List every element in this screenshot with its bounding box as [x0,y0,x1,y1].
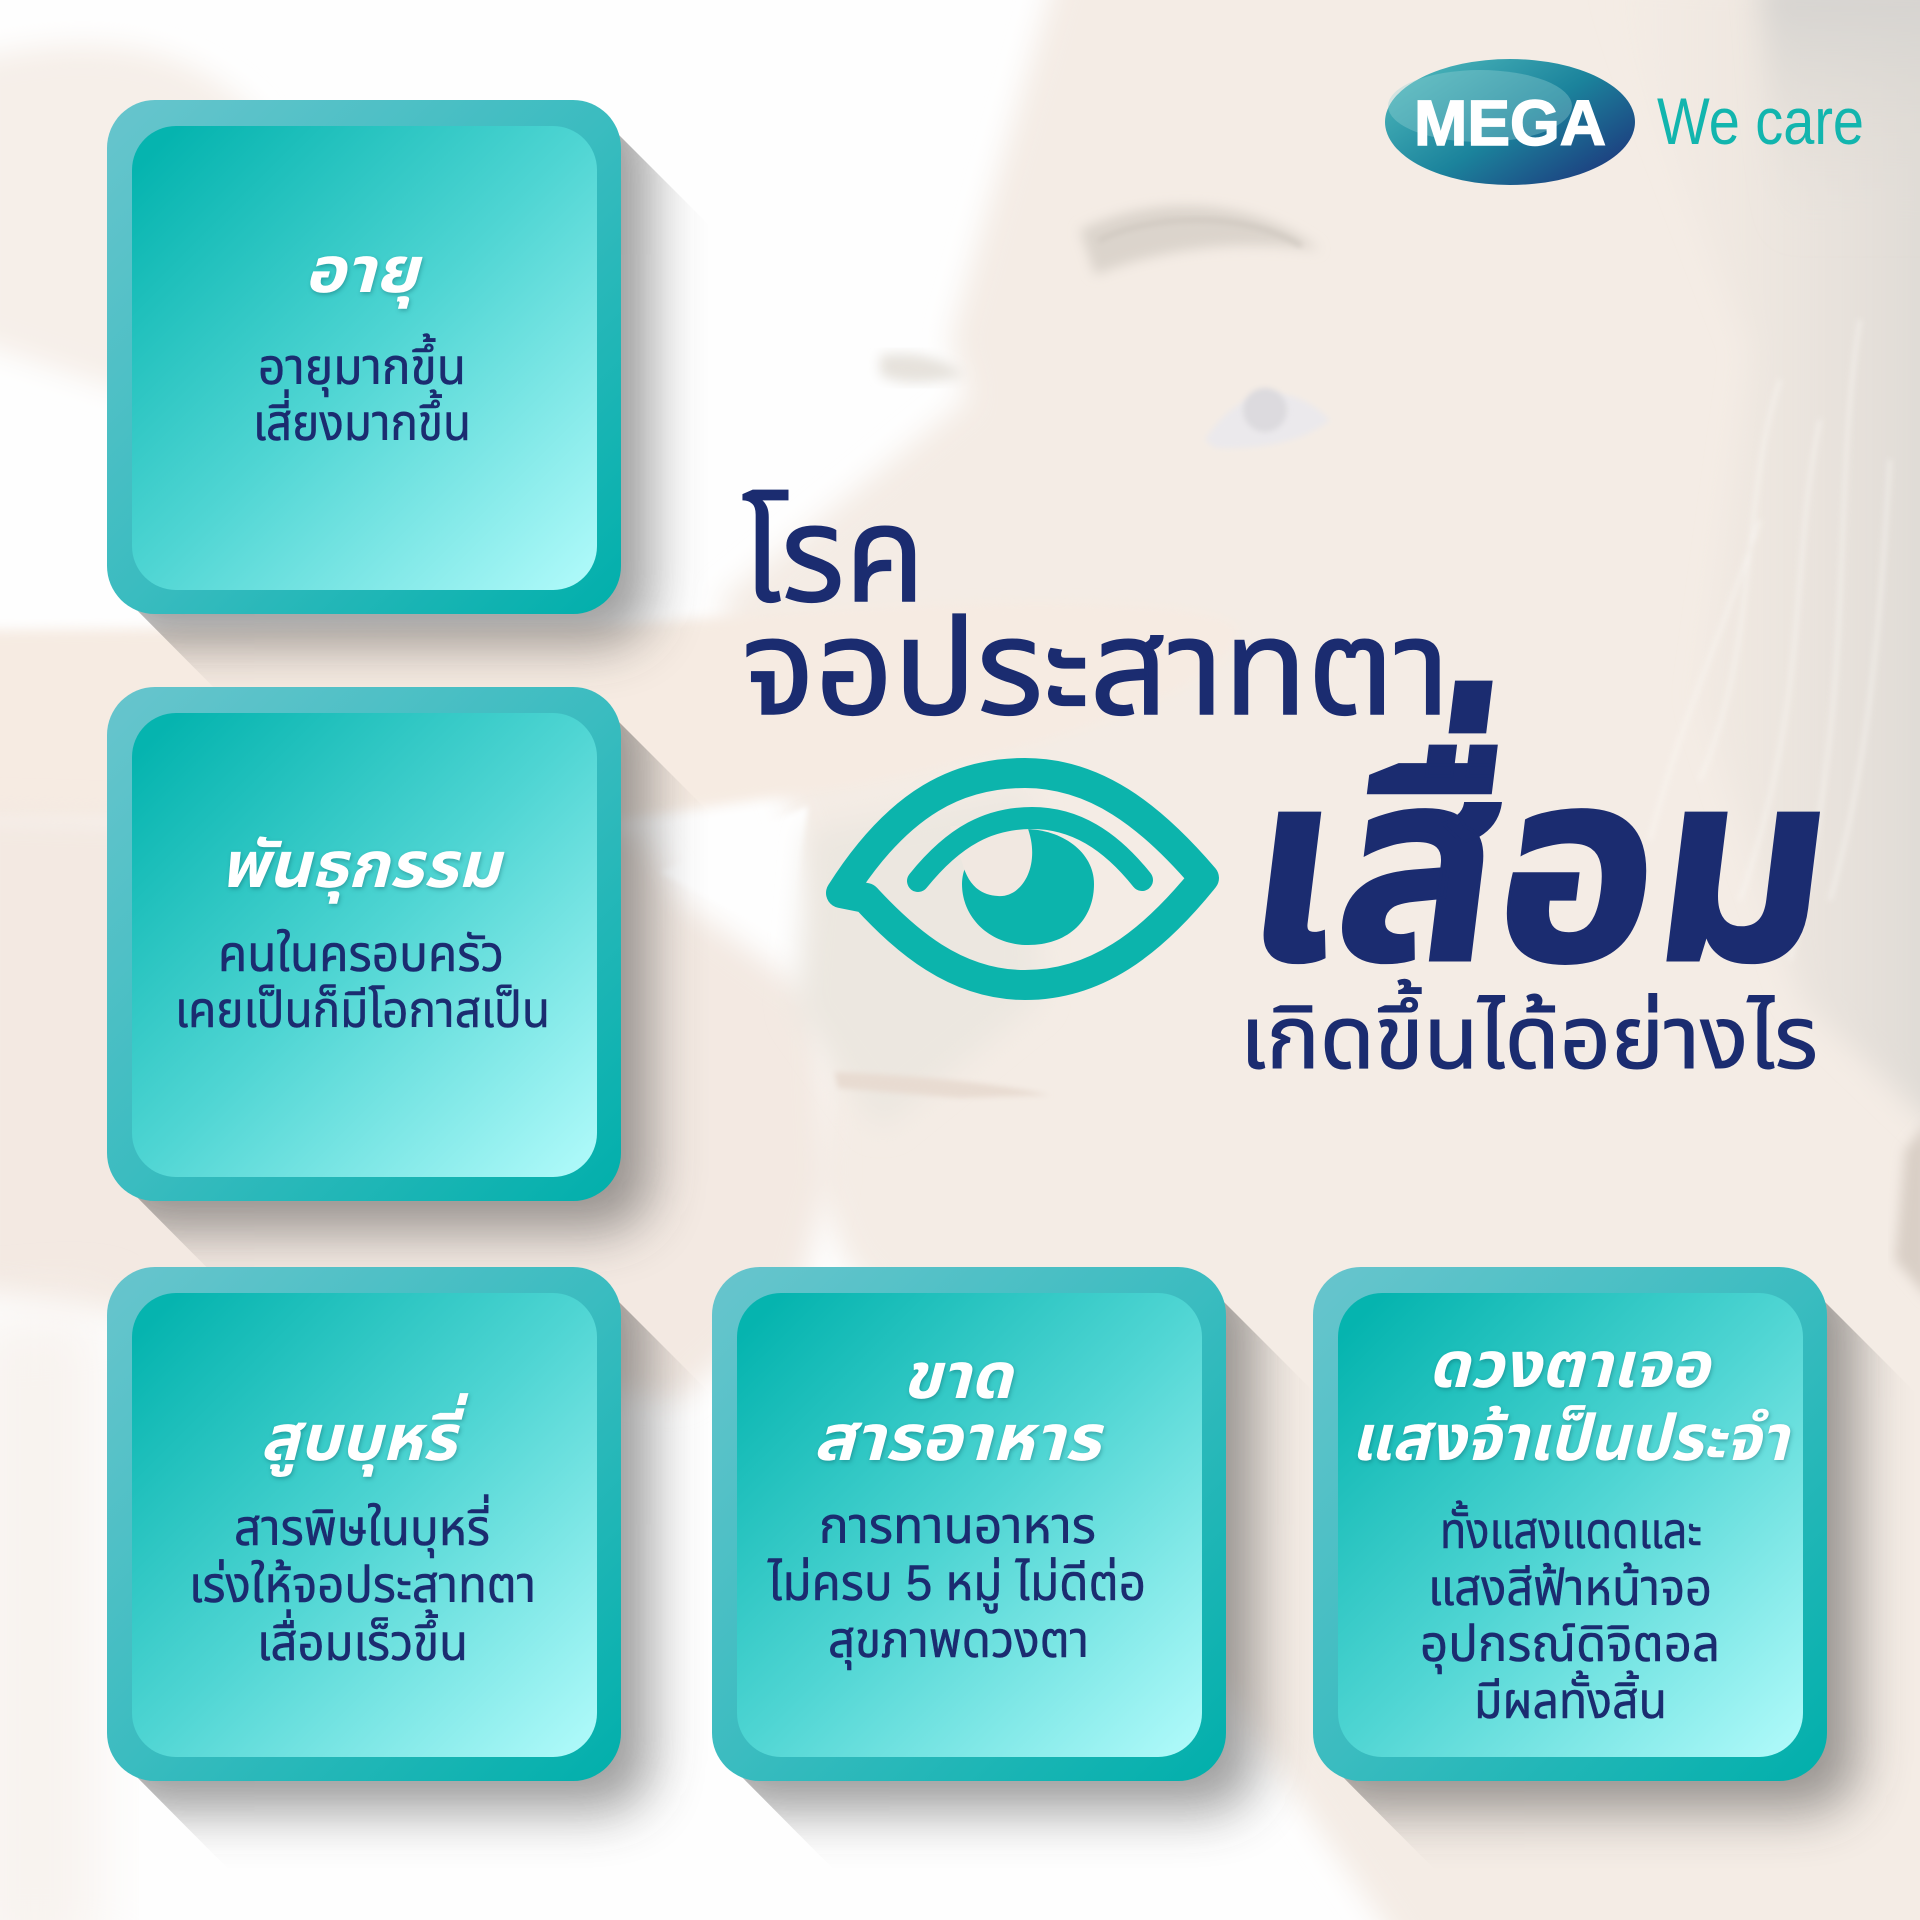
text: nutrition description: ไม่ครบ 5 หมู่ ไม่ดีต่อ [767,1555,1146,1613]
icon: MEGA oval: MEGA [1414,87,1606,159]
heading: line 1: โรค [742,481,925,630]
text: bright light description: มีผลทั้งสิ้น [1474,1670,1667,1729]
heading: nutrition [813,1340,1104,1474]
panel: bright light [1313,1267,1857,1811]
heading: bright light: แสงจ้าเป็นประจำ [1351,1402,1791,1474]
heading: nutrition: สารอาหาร [813,1402,1104,1474]
heading: line 2: จอประสาทตา [742,594,1450,743]
panel: nutrition [712,1267,1256,1811]
text: nutrition description [767,1498,1146,1670]
text: genetics description: เคยเป็นก็มีโอกาสเป็น [175,982,550,1038]
text: smoking description: เร่งให้จอประสาทตา [189,1557,536,1613]
heading: genetics: พันธุกรรม [220,829,505,904]
text: bright light description: อุปกรณ์ดิจิตอล [1420,1616,1720,1674]
heading: how it happens: เกิดขึ้นได้อย่างไร [1240,979,1818,1087]
heading: degeneration: เสื่อม [1232,679,1853,1018]
text: smoking description [189,1494,536,1671]
icon: MEGA oval [1385,59,1635,185]
text: smoking description: สารพิษในบุหรี่ [234,1494,490,1558]
heading: bright light [1351,1329,1791,1474]
heading: bright light: ดวงตาเจอ [1428,1329,1712,1401]
text: bright light description [1420,1500,1720,1729]
logo: MEGA We care [1385,59,1864,185]
title [742,481,1853,1087]
text: age description [253,333,471,451]
text: age description: เสี่ยงมากขึ้น [253,389,471,451]
panel: genetics [107,687,651,1231]
text: age description: อายุมากขึ้น [258,333,466,397]
text: nutrition description: การทานอาหาร [819,1498,1096,1554]
text: genetics description: คนในครอบครัว [218,926,504,982]
text: We care: We care [1657,84,1864,158]
heading: nutrition: ขาด [902,1340,1014,1412]
text: bright light description: แสงสีฟ้าหน้าจอ [1428,1560,1712,1616]
panel: smoking [107,1267,651,1811]
text: bright light description: ทั้งแสงแดดและ [1440,1500,1702,1559]
text: smoking description: เสื่อมเร็วขึ้น [257,1609,468,1671]
text: genetics description [175,926,550,1038]
heading: smoking: สูบบุหรี่ [260,1393,469,1477]
panel: age [107,100,651,644]
text: nutrition description: สุขภาพดวงตา [828,1612,1089,1670]
heading: age: อายุ [304,234,424,309]
icon: teal eye [841,773,1204,985]
